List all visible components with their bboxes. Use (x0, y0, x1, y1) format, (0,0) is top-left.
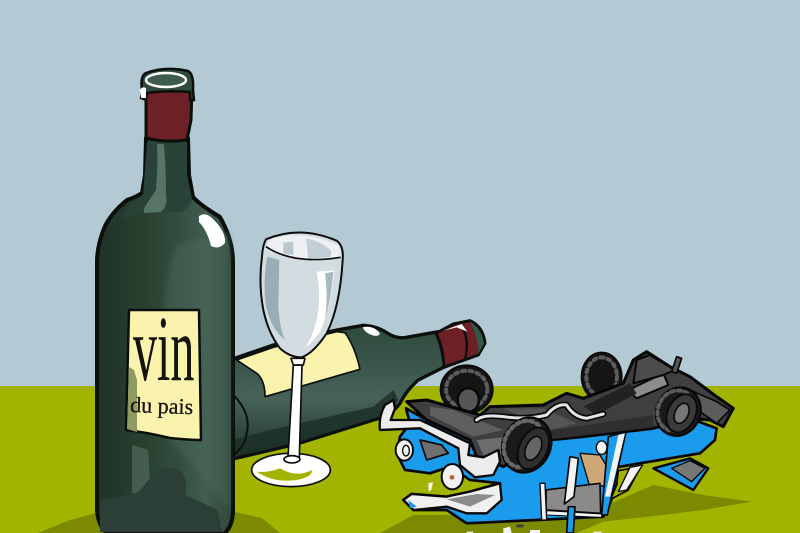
bottle label (126, 298, 201, 440)
front wheel right (648, 380, 709, 443)
lying bottle label (237, 332, 360, 397)
glass foot reflection (257, 468, 312, 481)
lying bottle capsule bands (443, 322, 484, 359)
rear wheel far right (582, 353, 622, 401)
car ground shadow (380, 485, 752, 533)
front wheel left (493, 409, 560, 481)
wine glass (252, 232, 343, 487)
lying bottle body (232, 325, 445, 459)
bottle body (97, 138, 233, 533)
glass stem knot (291, 358, 305, 365)
headlight right (442, 464, 463, 489)
grey car floor (546, 483, 601, 513)
label text: du pais: du pais (130, 392, 194, 419)
lying bottle highlight (363, 327, 380, 336)
bottle lip (140, 69, 194, 100)
glass foot (252, 453, 330, 487)
bottle body light patch (165, 232, 230, 510)
label shaded edge (127, 367, 137, 432)
lying bottle base curve (233, 395, 248, 455)
white bumper (380, 400, 500, 477)
broken door panel (653, 458, 708, 490)
sky background (0, 0, 800, 387)
glass bowl (260, 232, 343, 357)
engine block (583, 355, 730, 423)
white car pillars (540, 432, 643, 533)
standing wine bottle (97, 69, 233, 533)
lying bottle capsule (436, 321, 485, 367)
label shadow patch (132, 445, 150, 498)
crumpled hood (403, 483, 502, 513)
white highlight (199, 214, 225, 247)
glass stem (288, 365, 302, 457)
glass inner shading (265, 235, 341, 348)
blue car body (397, 408, 717, 523)
lying wine bottle (232, 321, 485, 459)
bottle capsule (146, 90, 192, 141)
label text: vin: vin (133, 298, 194, 401)
white exhaust pipe (477, 405, 603, 420)
green ground (0, 386, 800, 533)
bottom dark reflection (100, 468, 222, 532)
lying bottle dark lower shade (233, 390, 398, 457)
headlight left (396, 439, 413, 461)
ground shadow: standing bottle (38, 512, 280, 533)
car interior seat (580, 453, 617, 487)
chassis lighter panels (420, 407, 653, 460)
debris on ground (428, 482, 602, 533)
glass stem base (284, 456, 300, 463)
white exhaust pipe highlight (477, 405, 603, 420)
neck light stripe (144, 144, 166, 213)
green gap through window (611, 467, 641, 499)
neck shading (122, 142, 192, 218)
overturned blue car (380, 352, 752, 533)
rear wheel far left (441, 365, 493, 413)
dark grey chassis (407, 352, 733, 467)
